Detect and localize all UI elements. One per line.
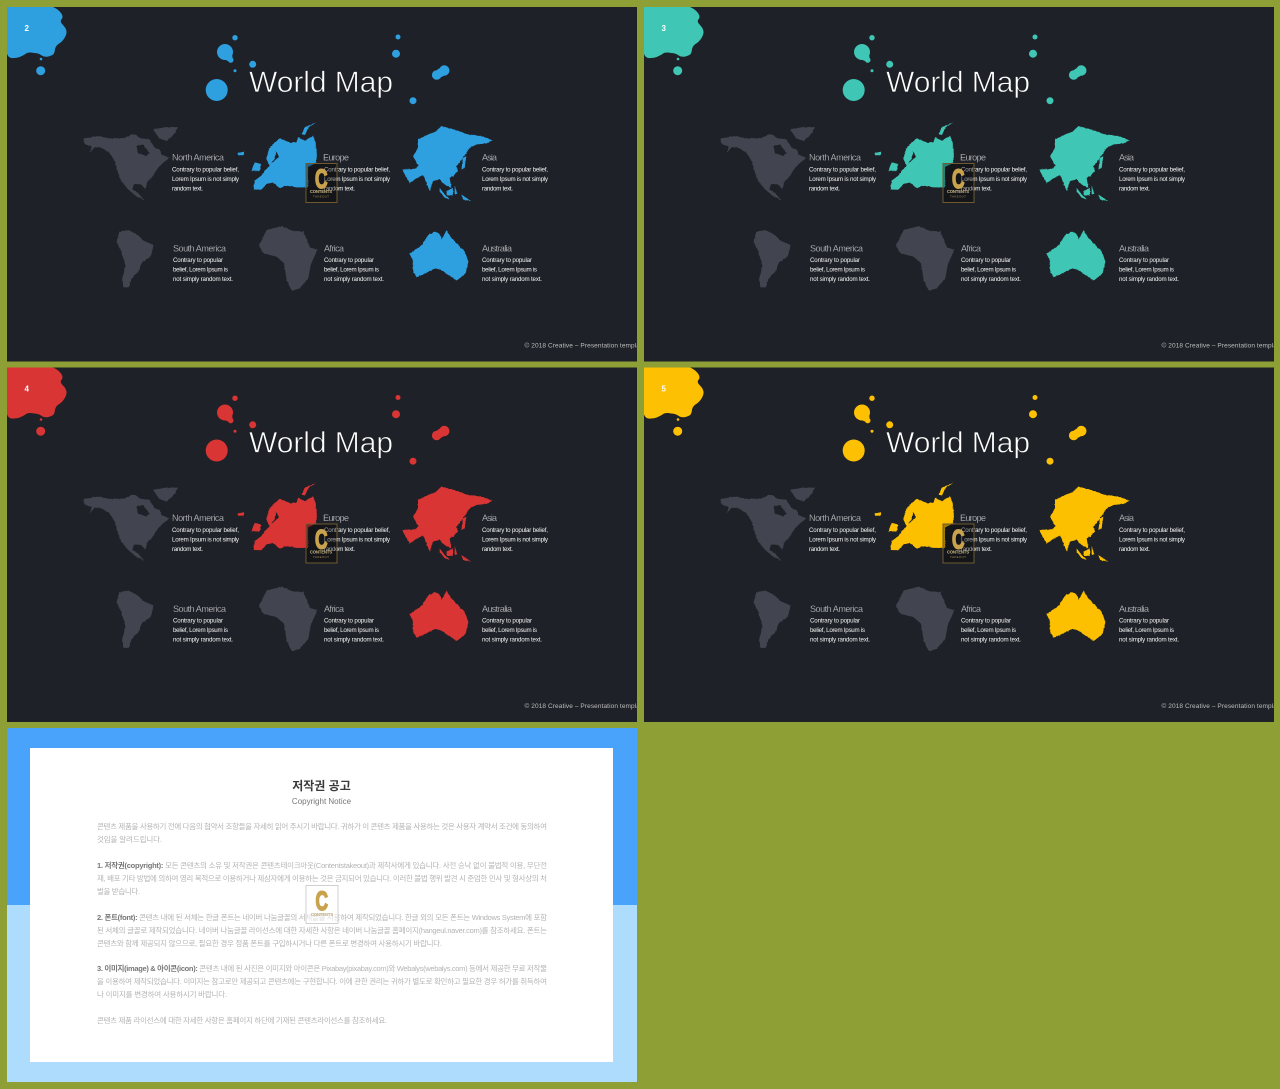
text: Asia: Lorem Ipsum is not simply (1119, 536, 1186, 544)
text: South America: belief, Lorem Ipsum is (173, 266, 228, 274)
text: Europe (324, 154, 390, 190)
ink splash with page number: 3 (662, 24, 666, 33)
map: Australia (409, 230, 468, 281)
slide 2: blue world map (7, 7, 646, 362)
text: Africa (961, 604, 1021, 644)
map: Australia (1046, 590, 1105, 641)
copyright subheading: Copyright Notice (292, 797, 352, 806)
map: North America (83, 488, 178, 561)
text: North America (172, 152, 240, 192)
clause 3: image and icon: 을 이용하여 제작되었습니다. 이미지는 참고로만 제공되고 콘텐츠에는 구현합니다. 이에 관한 권리는 귀하가 별도로 확인하고 필요한 경우 허가를 취득하여 (97, 976, 547, 986)
text: Asia: Lorem Ipsum is not simply (482, 536, 549, 544)
text: Australia (1119, 244, 1179, 283)
text: North America: North America (809, 152, 861, 162)
text: Europe: Lorem Ipsum is not simply (961, 536, 1028, 544)
text: Australia: not simply random text. (1119, 636, 1179, 644)
text: Europe: Contrary to popular belief, (961, 527, 1027, 534)
clause 1: copyright: 1. 저작권(copyright): 모든 콘텐츠의 소유 및 저작권은 콘텐츠테이크아웃(Contentstakeout)과 제작사에게 있습니다. 사전 승낙 없이 불법적 이용, 무단전 (97, 860, 547, 870)
text: Asia: random text. (1119, 546, 1150, 553)
clause 3: image and icon (97, 963, 547, 999)
text: Africa (324, 604, 384, 644)
text: Europe: random text. (324, 546, 355, 553)
text: South America: South America (810, 604, 863, 614)
text: Europe (960, 513, 1028, 553)
text: South America: South America (173, 244, 226, 254)
text: Australia: Contrary to popular (1119, 257, 1169, 264)
text: Africa: belief, Lorem Ipsum is (324, 266, 379, 274)
ink splash with page number (644, 368, 1086, 465)
text: Asia: random text. (482, 186, 513, 192)
watermark logo (306, 164, 337, 202)
watermark logo on notice: CONTENTS (311, 912, 333, 917)
watermark logo on notice (306, 886, 338, 924)
intro paragraph (97, 821, 547, 844)
text: Africa: not simply random text. (961, 636, 1021, 644)
ink splash with page number: 5 (662, 384, 666, 394)
text: North America (809, 152, 877, 192)
text: Australia: Australia (482, 604, 512, 614)
text: Africa: belief, Lorem Ipsum is (961, 627, 1016, 634)
text: Africa: Contrary to popular (961, 618, 1011, 624)
clause 1: copyright: 벌을 받습니다. (97, 886, 140, 896)
text: Australia: Australia (1119, 244, 1149, 254)
map: Australia (409, 590, 468, 641)
text: South America (810, 244, 870, 283)
clause 3: image and icon: 나 이미지를 변경하여 사용하시기 바랍니다. (97, 989, 227, 999)
text: Africa: Africa (324, 604, 344, 614)
text: Africa (961, 244, 1021, 283)
text: Australia (482, 604, 542, 644)
text: Europe: Lorem Ipsum is not simply (324, 536, 391, 544)
text: South America (173, 604, 233, 644)
text: South America: not simply random text. (173, 276, 233, 283)
text: Europe: Lorem Ipsum is not simply (324, 176, 391, 183)
map: Asia (402, 487, 493, 562)
text: South America: Contrary to popular (173, 618, 223, 624)
footer: © 2018 Creative – Presentation template (1162, 342, 1280, 350)
text: Asia: Contrary to popular belief, (1119, 166, 1185, 174)
text: North America: random text. (172, 186, 203, 192)
text: North America: Lorem Ipsum is not simply (172, 176, 240, 183)
text: North America (809, 513, 877, 553)
text: Asia: random text. (1119, 186, 1150, 192)
text: Africa: not simply random text. (324, 636, 384, 644)
text: Africa: not simply random text. (961, 276, 1021, 283)
text: Africa: Africa (961, 604, 981, 614)
text: Europe (323, 513, 391, 553)
text: North America: North America (172, 513, 224, 523)
watermark logo (943, 164, 974, 202)
text: Australia: not simply random text. (1119, 276, 1179, 283)
text: South America: South America (810, 244, 863, 254)
text: Australia: not simply random text. (482, 636, 542, 644)
text: North America: Contrary to popular belief, (809, 527, 876, 534)
map: Europe (237, 122, 317, 190)
text: Australia: belief, Lorem Ipsum is (1119, 266, 1174, 274)
map: South America (754, 590, 791, 648)
map: Africa (259, 226, 317, 291)
clause 2: font: 된 서체의 글꼴로 제작되었습니다. 네이버 나눔글꼴 라이선스에 대한 자세한 사항은 네이버 나눔글꼴 홈페이지(hangeul.naver.com)를 참조하세요. 폰트는 (97, 925, 547, 935)
text: Asia: Lorem Ipsum is not simply (482, 176, 549, 183)
text: South America: South America (173, 604, 226, 614)
text: South America: Contrary to popular (810, 618, 860, 624)
text: Europe: Europe (960, 152, 986, 162)
text: Europe: Contrary to popular belief, (324, 166, 390, 174)
text: Asia (1119, 152, 1186, 192)
text: Europe: Contrary to popular belief, (324, 527, 390, 534)
slide 4: red world map (7, 368, 646, 722)
text: Australia: belief, Lorem Ipsum is (482, 627, 537, 634)
text: Europe (960, 154, 1027, 190)
text: Europe: Europe (323, 152, 349, 162)
ink splash with page number (7, 368, 449, 465)
text: North America (172, 513, 240, 553)
text: Asia (482, 513, 549, 553)
text: South America (173, 244, 233, 283)
title: World Map (886, 66, 1030, 99)
map: South America (754, 230, 791, 287)
map: North America (720, 127, 815, 200)
slide 3: teal world map (644, 7, 1280, 362)
map: Asia (402, 126, 493, 201)
text: Africa: Contrary to popular (324, 257, 374, 264)
text: Europe: Contrary to popular belief, (961, 166, 1027, 174)
clause 2: font (97, 912, 547, 948)
map: Europe (874, 483, 954, 550)
map: South America (117, 230, 154, 287)
watermark logo (306, 524, 337, 563)
map: Africa (896, 586, 954, 651)
text: Europe: Europe (323, 513, 349, 523)
text: South America: belief, Lorem Ipsum is (810, 266, 865, 274)
map: South America (117, 590, 154, 648)
text: Asia: Asia (1119, 152, 1134, 162)
text: South America: not simply random text. (173, 636, 233, 644)
text: North America: Contrary to popular belief, (172, 166, 239, 174)
slide 5: yellow world map (644, 368, 1280, 722)
footer: © 2018 Creative – Presentation template (524, 342, 646, 350)
text: Europe: Europe (960, 513, 986, 523)
text: Australia: not simply random text. (482, 276, 542, 283)
footer: © 2018 Creative – Presentation template (524, 702, 646, 710)
text: North America: Lorem Ipsum is not simply (809, 536, 877, 544)
clause 2: font: 콘텐츠와 함께 제공되지 않으므로, 필요한 경우 정품 폰트를 구입하시거나 다른 폰트로 변경하여 사용하시기 바랍니다. (97, 938, 442, 948)
text: Africa: Africa (324, 244, 344, 254)
clause 3: image and icon: 3. 이미지(image) & 아이콘(icon): 콘텐츠 내에 된 사진은 이미지와 아이콘은 Pixabay(pixabay.com)와 Webalys(webalys.com) 등에서 제공한 무료 저작물 (97, 963, 547, 973)
text: Asia: random text. (482, 546, 513, 553)
text: North America: Lorem Ipsum is not simply (809, 176, 877, 183)
title: World Map (886, 426, 1030, 460)
text: Australia: Australia (1119, 604, 1149, 614)
map: Europe (874, 122, 954, 190)
text: Africa: belief, Lorem Ipsum is (961, 266, 1016, 274)
text: South America: not simply random text. (810, 636, 870, 644)
text: North America: random text. (809, 546, 840, 553)
clause 2: font: 2. 폰트(font): 콘텐츠 내에 된 서체는 한글 폰트는 네이버 나눔글꼴의 서체들을 사용하여 제작되었습니다. 한글 외의 모든 폰트는 Windows System에 포함 (97, 912, 547, 922)
watermark logo (943, 524, 974, 563)
text: Australia: belief, Lorem Ipsum is (482, 266, 537, 274)
text: South America: Contrary to popular (173, 257, 223, 264)
text: North America: Contrary to popular belief, (172, 527, 239, 534)
closing line: 콘텐츠 제품 라이선스에 대한 자세한 사항은 홈페이지 하단에 기재된 콘텐츠라이선스를 참조하세요. (97, 1015, 387, 1025)
text: Europe: random text. (961, 186, 992, 192)
text: Asia: Asia (482, 152, 497, 162)
text: South America: Contrary to popular (810, 257, 860, 264)
text: Africa: Contrary to popular (961, 257, 1011, 264)
map: Australia (1046, 230, 1105, 281)
panel: copyright notice slide (7, 728, 637, 1082)
text: South America: belief, Lorem Ipsum is (810, 627, 865, 634)
text: South America (810, 604, 870, 644)
intro paragraph: 것임을 알려드립니다. (97, 834, 162, 844)
text: Asia: Contrary to popular belief, (482, 527, 548, 534)
map: Asia (1039, 487, 1130, 562)
title: World Map (249, 426, 393, 460)
map: Europe (237, 483, 317, 550)
watermark logo on notice: C (316, 886, 328, 916)
text: Europe: random text. (961, 546, 992, 553)
ink splash with page number (7, 7, 449, 104)
text: Asia: Contrary to popular belief, (482, 166, 548, 174)
footer: © 2018 Creative – Presentation template (1162, 702, 1280, 710)
text: North America: North America (172, 152, 224, 162)
copyright heading: 저작권 공고 (292, 778, 351, 793)
text: Asia (1119, 513, 1186, 553)
text: Asia (482, 152, 549, 192)
text: South America: not simply random text. (810, 276, 870, 283)
text: Australia (482, 244, 542, 283)
text: South America: belief, Lorem Ipsum is (173, 627, 228, 634)
ink splash with page number: 2 (24, 24, 30, 33)
text: Australia: Contrary to popular (1119, 618, 1169, 624)
text: Asia: Asia (1119, 513, 1134, 523)
map: North America (83, 127, 178, 200)
clause 1: copyright: 재, 배포 기타 방법에 의하여 영리 목적으로 이용하거나 제삼자에게 이용하는 것은 금지되어 있습니다. 이러한 불법 행위 발견 시 준엄한 민사 및 형사상의 처 (97, 873, 547, 883)
text: Asia: Asia (482, 513, 497, 523)
text: North America: Contrary to popular belief, (809, 166, 876, 174)
map: Africa (259, 586, 317, 651)
ink splash with page number: 4 (24, 384, 30, 394)
map: Asia (1039, 126, 1130, 201)
text: Australia: Contrary to popular (482, 257, 532, 264)
clause 1: copyright (97, 860, 547, 896)
text: Europe: random text. (324, 186, 355, 192)
text: Australia: belief, Lorem Ipsum is (1119, 627, 1174, 634)
text: Asia: Lorem Ipsum is not simply (1119, 176, 1186, 183)
text: North America: random text. (809, 186, 840, 192)
map: Africa (896, 226, 954, 291)
text: North America: random text. (172, 546, 203, 553)
text: Africa: Contrary to popular (324, 618, 374, 624)
text: Africa: not simply random text. (324, 276, 384, 283)
text: Australia (1119, 604, 1179, 644)
text: Africa (324, 244, 384, 283)
text: Europe: Lorem Ipsum is not simply (961, 176, 1028, 183)
text: Asia: Contrary to popular belief, (1119, 527, 1185, 534)
map: North America (720, 488, 815, 561)
text: Australia: Australia (482, 244, 512, 254)
intro paragraph: 콘텐츠 제품을 사용하기 전에 다음의 협약서 조항들을 자세히 읽어 주시기 바랍니다. 귀하가 이 콘텐츠 제품을 사용하는 것은 사용자 계약서 조건에 동의하여 (97, 821, 547, 831)
text: North America: Lorem Ipsum is not simply (172, 536, 240, 544)
text: Africa: belief, Lorem Ipsum is (324, 627, 379, 634)
text: North America: North America (809, 513, 861, 523)
text: Australia: Contrary to popular (482, 618, 532, 624)
title: World Map (249, 66, 393, 99)
text: Africa: Africa (961, 244, 981, 254)
ink splash with page number (644, 7, 1086, 104)
